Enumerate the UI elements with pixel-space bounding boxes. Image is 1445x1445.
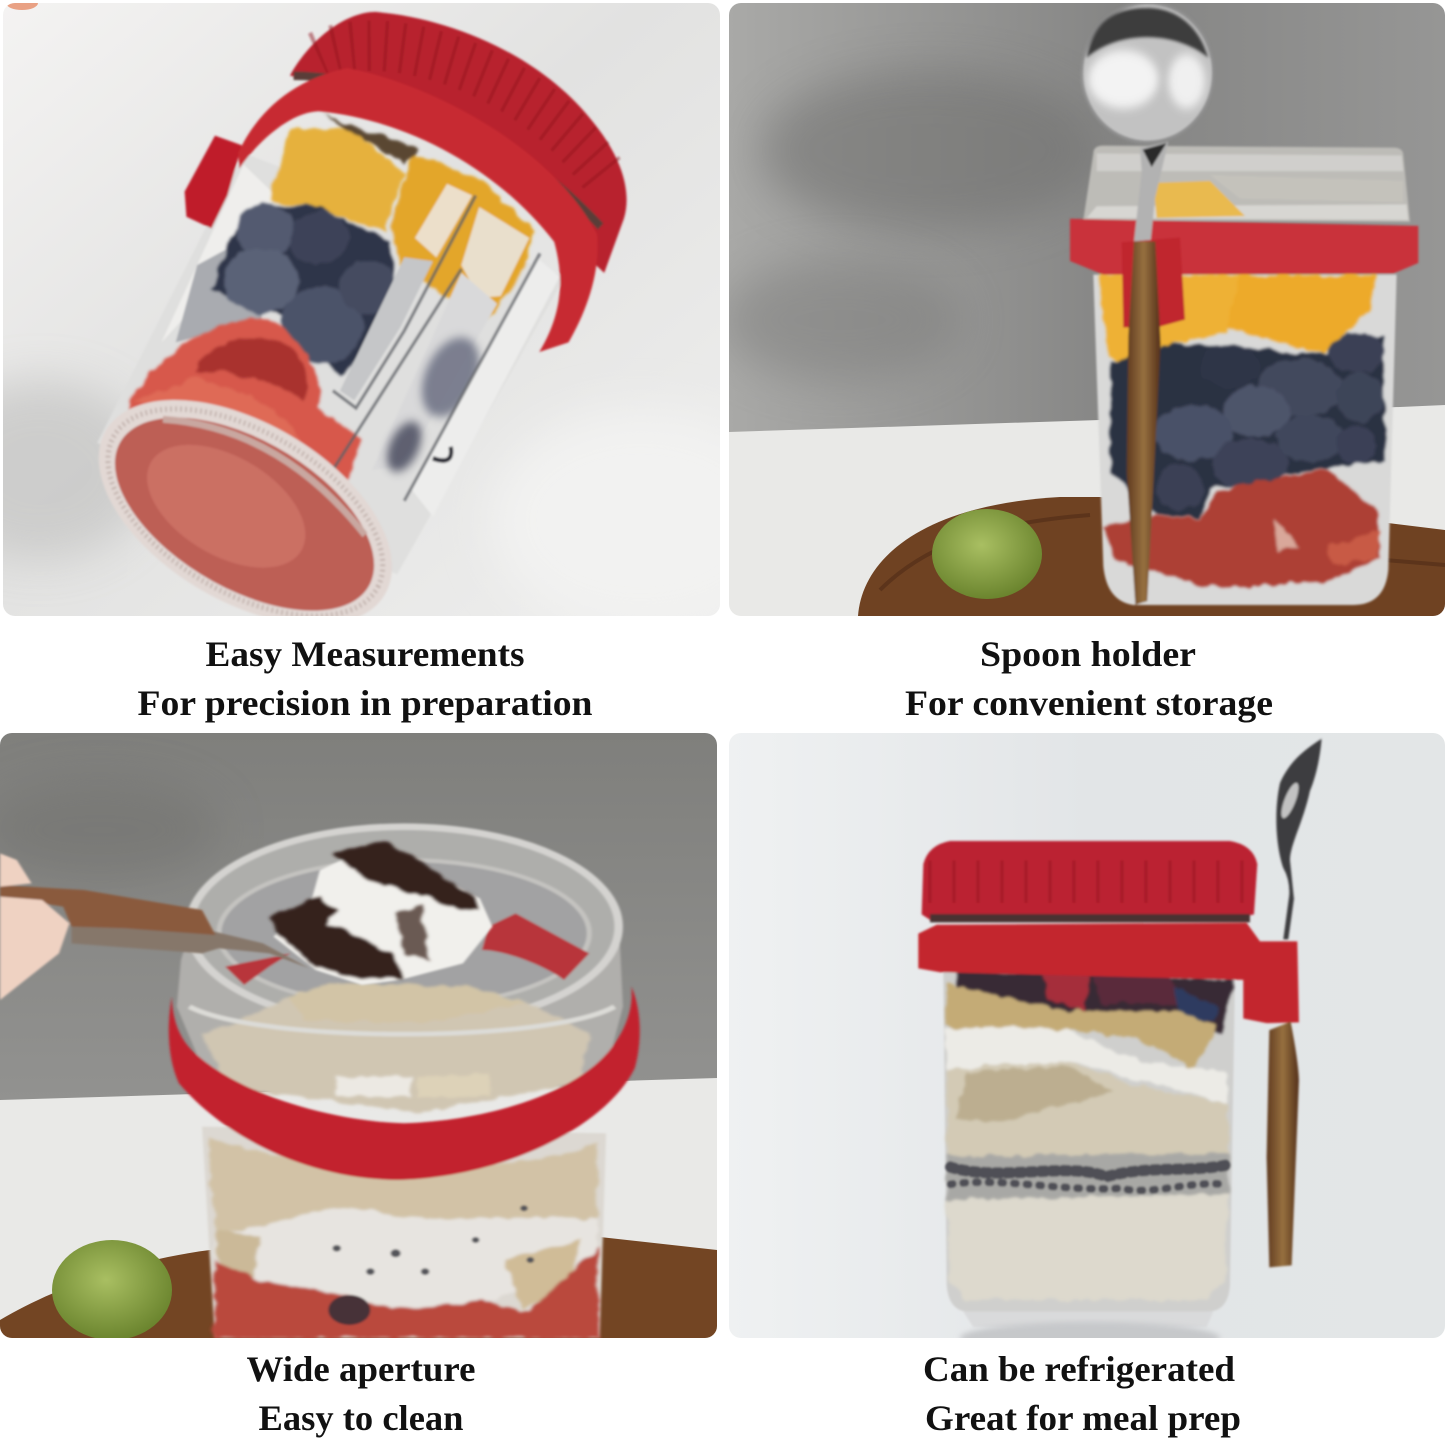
panel: easy measurements photo [3,3,720,616]
wooden board [0,1237,717,1338]
blueberries [211,203,397,377]
jar base [98,398,392,616]
mango pieces [269,114,535,323]
spoon [1267,739,1322,1267]
heading: spoon holder: Spoon holder [980,634,1196,674]
heading: spoon holder [905,634,1273,723]
silicone band and spoon clip [918,923,1299,1023]
panel: wide aperture photo [0,733,717,1340]
heading: easy measurements: For precision in preparation [138,683,592,723]
heading: wide aperture [246,1349,476,1438]
heading: wide aperture: Wide aperture [246,1349,476,1389]
icon: green grape [932,509,1042,599]
blueberries layer [1110,333,1385,519]
silicone band [1070,219,1418,275]
chia seed band [950,1165,1227,1190]
clip tab [185,136,242,228]
spoon with yogurt and hand [0,840,492,1000]
heading: can be refrigerated: Can be refrigerated [923,1349,1235,1389]
ribbed lid [290,12,627,273]
oats inside jar [202,983,589,1113]
icon: tilted jar with measurement marks [98,10,628,616]
heading: can be refrigerated: Great for meal prep [925,1398,1241,1438]
heading: can be refrigerated [923,1349,1241,1438]
icon: upright jar with fruit [1070,3,1418,605]
icon: jar with lid, oats and spoon [918,739,1322,1327]
panel: spoon holder photo [720,3,1445,616]
mango layer [1098,275,1377,367]
spoon with clip [1082,3,1213,605]
red band seen through glass [225,913,589,985]
measurement strip [333,184,560,516]
panel: refrigerated photo [729,733,1445,1354]
heading: easy measurements [138,634,592,723]
strawberry layer [1103,468,1380,587]
heading: spoon holder: For convenient storage [905,683,1273,723]
jar body layers [202,1127,606,1338]
heading: easy measurements: Easy Measurements [206,634,524,674]
icon: green grape [52,1240,172,1340]
top fruit layer [957,968,1233,1034]
heading: wide aperture: Easy to clean [258,1398,464,1438]
silicone band [238,68,598,352]
wooden board [858,497,1445,616]
strawberry layer [129,318,361,505]
icon: open jar with oats [169,827,640,1338]
lid [922,841,1257,922]
silicone band [169,987,640,1180]
layered oats [947,984,1228,1300]
